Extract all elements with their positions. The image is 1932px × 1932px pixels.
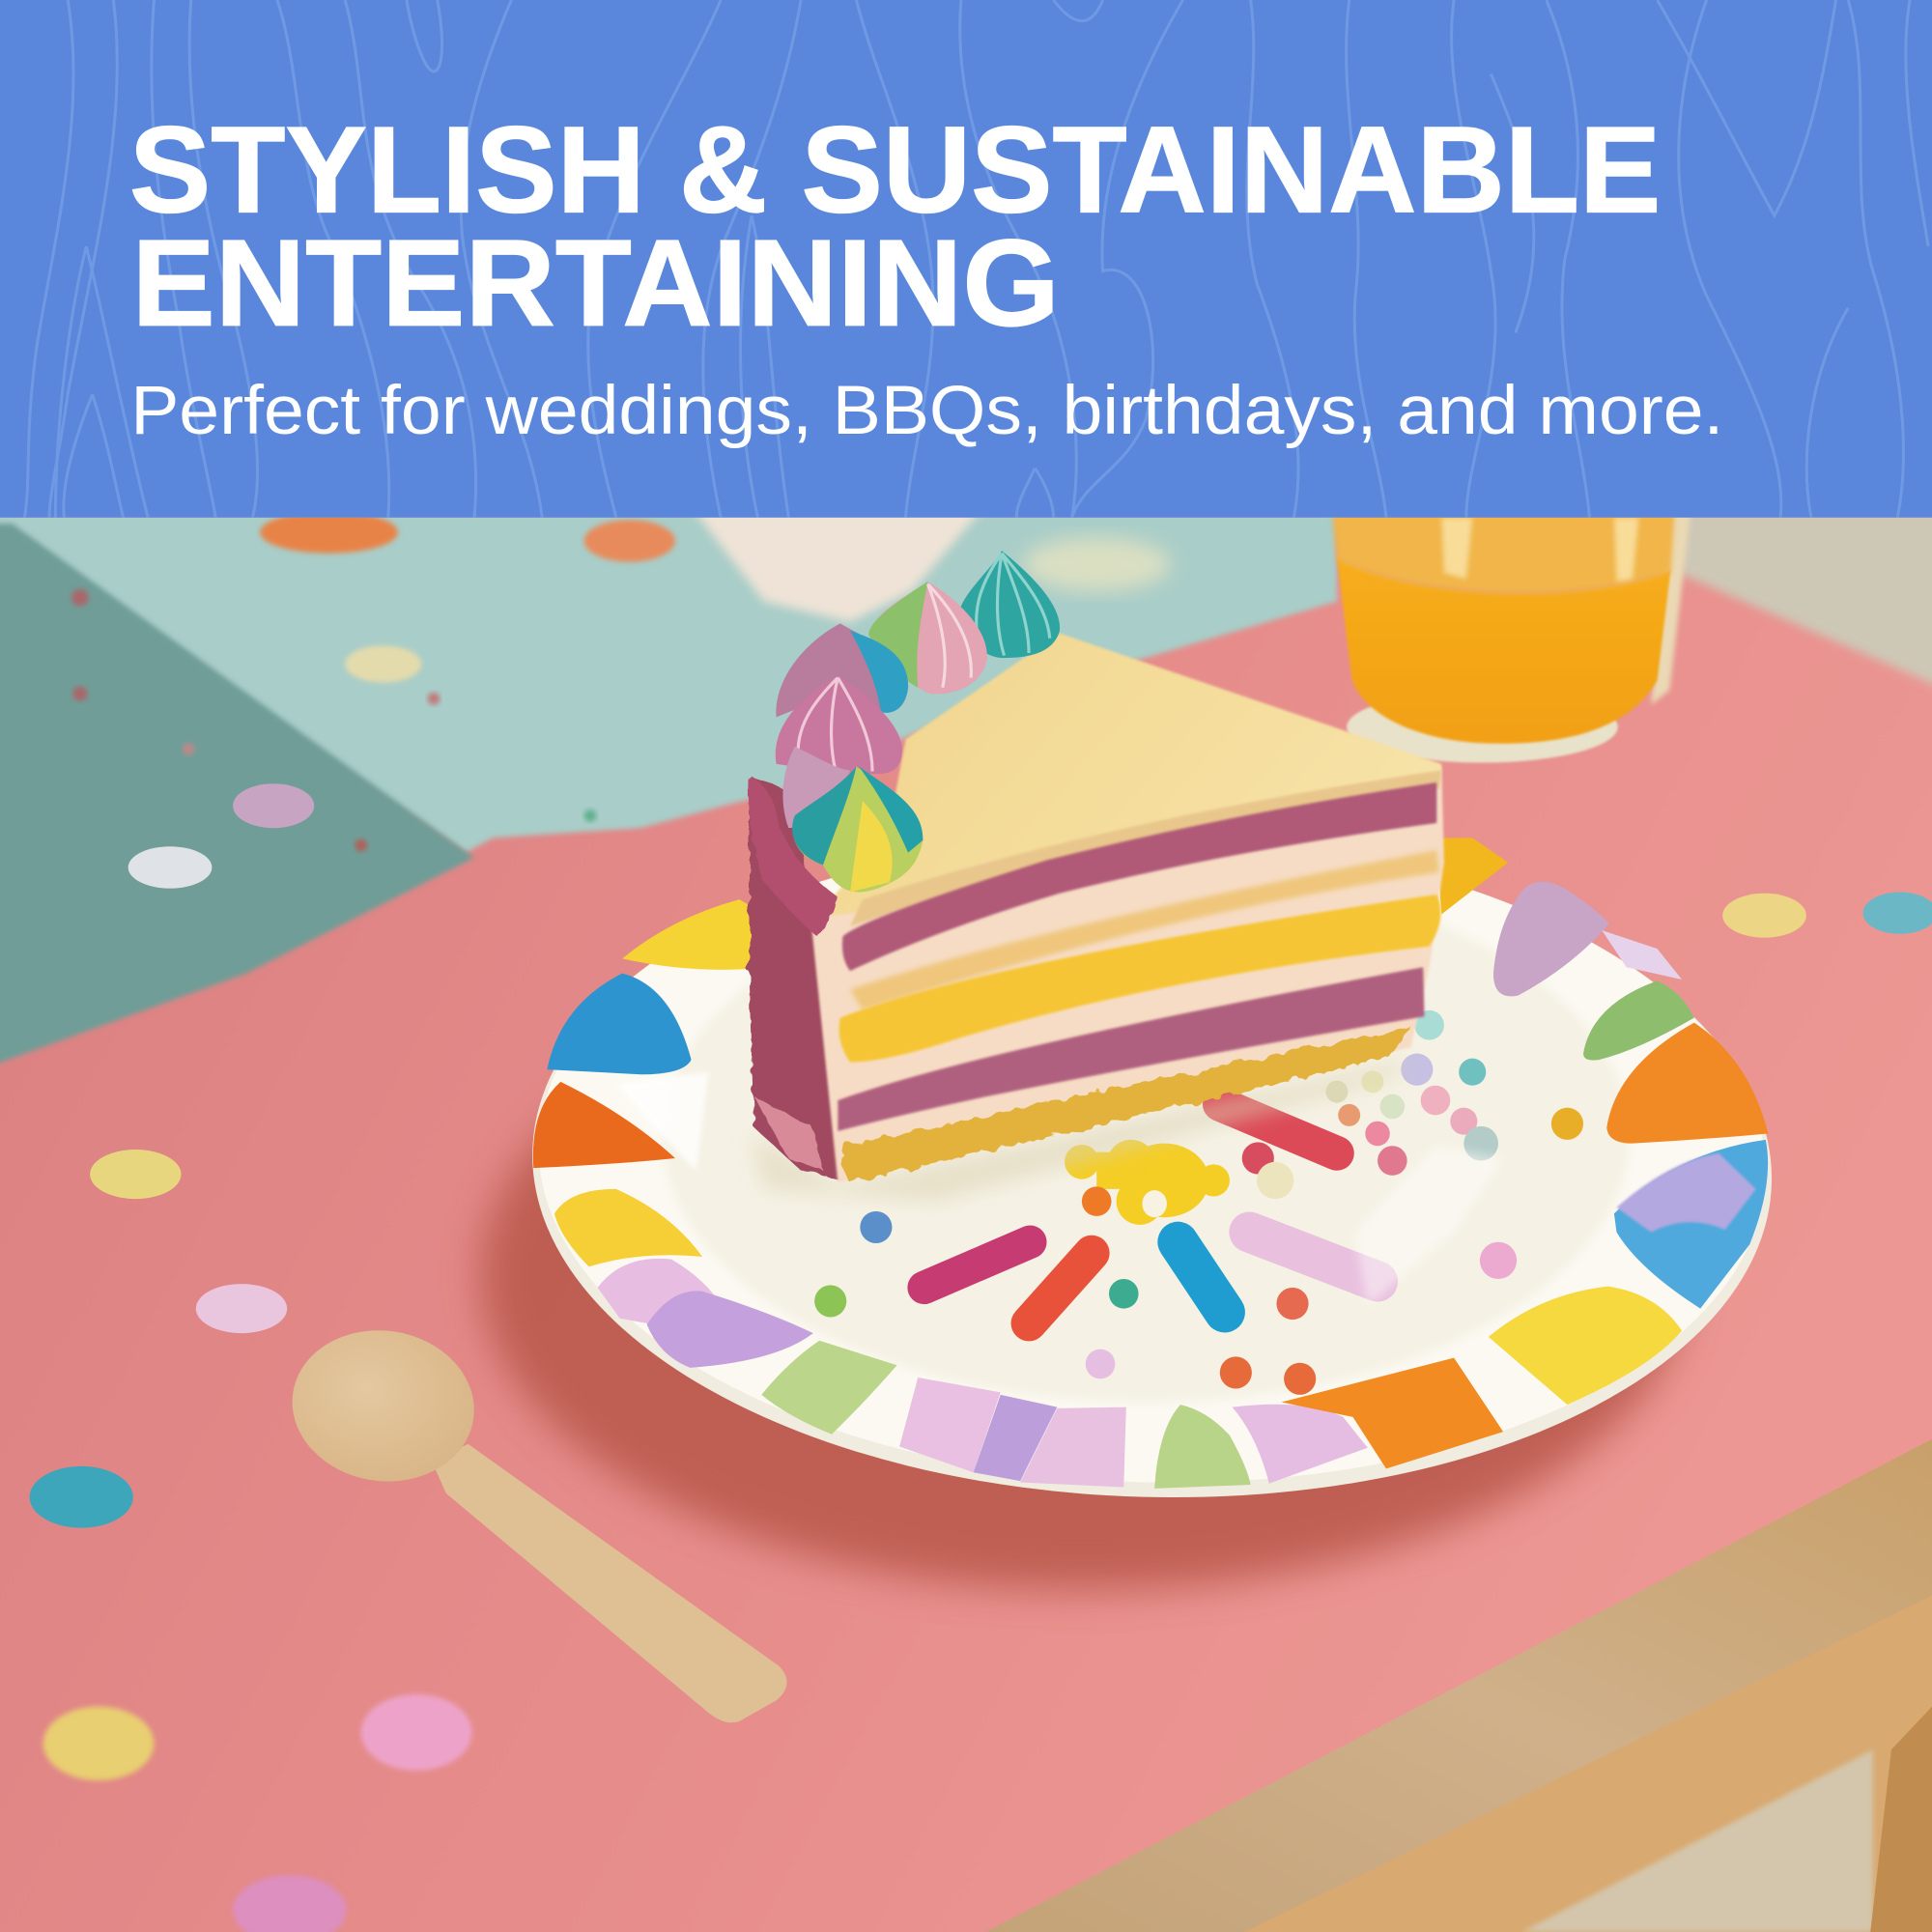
confetti: left side [90, 1150, 182, 1199]
drinking glass of orange juice [1331, 493, 1693, 763]
plate centre dots [814, 1010, 1583, 1395]
banner background [0, 0, 1932, 518]
orange rim patch 3 [1606, 1023, 1768, 1144]
title: ENTERTAINING [131, 215, 1060, 353]
spoon [282, 1319, 787, 1722]
purple rim patch [647, 1291, 813, 1368]
lilac sprinkle [1249, 1233, 1378, 1282]
cake shadow on plate [752, 1060, 1410, 1202]
confetti dots [30, 511, 1932, 1932]
teal meringue [958, 551, 1060, 658]
paper plate [524, 820, 1780, 1513]
spoon bowl [282, 1319, 484, 1493]
green rim patch 3 [1583, 980, 1694, 1061]
plate centre sprinkles [924, 1104, 1378, 1323]
glass upper part [1331, 493, 1676, 593]
confetti: right side [1722, 894, 1806, 938]
title [129, 101, 1661, 353]
table wood side [1244, 1596, 1932, 1932]
dark teal napkin [0, 524, 474, 1067]
top edge shadow [850, 770, 1441, 926]
plate shadow [480, 961, 1688, 1589]
cake top icing [813, 634, 1441, 918]
orange sprinkle [1029, 1253, 1092, 1323]
confetti: on napkin [260, 511, 398, 554]
lower raspberry layer [838, 967, 1424, 1131]
glass highlights [1441, 518, 1638, 582]
side frosting pale pink base [754, 1096, 823, 1171]
subtitle: Perfect for weddings, BBQs, birthdays, and more. [130, 372, 1723, 449]
yellow flower blob [1065, 1140, 1230, 1225]
green rim patch [761, 1341, 897, 1435]
yellow rim patch 3 [1489, 1287, 1682, 1405]
thin cream and orange layer [850, 850, 1439, 1010]
pink rim patch 2 [899, 1378, 1001, 1472]
crumb base layer [841, 1026, 1410, 1182]
small lilac meringue [782, 747, 850, 828]
yellow sponge layer [839, 895, 1441, 1062]
spoon handle [431, 1444, 787, 1722]
pink-green meringue [868, 582, 987, 694]
blurred fork and spoon on napkin [690, 505, 985, 622]
pale teal napkin [0, 493, 1337, 853]
cake slice [749, 551, 1444, 1202]
rainbow meringue [792, 766, 923, 892]
purple-pink meringue [776, 675, 902, 774]
red sprinkle [1220, 1104, 1337, 1153]
glass wall tint [1333, 493, 1693, 705]
magenta sprinkle [924, 1242, 1030, 1288]
title: STYLISH & SUSTAINABLE [129, 101, 1661, 239]
blue sprinkle [1178, 1242, 1225, 1312]
table wood edge [985, 1439, 1932, 1932]
purple rim patch 3 [1493, 882, 1609, 996]
plate white rim [530, 821, 1774, 1498]
green rim patch 2 [1154, 1405, 1251, 1489]
blue and purple rim patch [1614, 1140, 1768, 1309]
rim pattern shapes [533, 838, 1768, 1489]
pink rim patch 4 [1233, 1405, 1368, 1484]
glossy reflections [616, 1072, 1503, 1306]
plate edge [524, 820, 1780, 1513]
plate inner well [663, 870, 1629, 1403]
floor beneath table [1521, 1749, 1873, 1932]
orange rim patch 2 [1282, 1358, 1503, 1468]
orange rim patch [533, 1082, 675, 1168]
meringue frosting swirls [749, 551, 1060, 939]
pink rim patch [598, 1259, 721, 1324]
small yellow rim patch [1435, 838, 1508, 914]
photo: cake on a party table [0, 493, 1932, 1932]
blurred pale shape on napkin [1023, 537, 1171, 591]
blue-pink meringue [776, 623, 908, 717]
table leg [1870, 1707, 1932, 1932]
yellow rim patch [622, 899, 756, 970]
upper raspberry layer [842, 782, 1436, 971]
cake outer side [750, 777, 840, 1180]
pink rim patch 3 [1020, 1407, 1126, 1488]
blue rim patch [547, 974, 692, 1074]
juice [1337, 557, 1671, 744]
cake front face [810, 766, 1444, 1182]
header banner [0, 0, 1932, 518]
pink tablecloth [0, 666, 1932, 1783]
lilac rim tint [1602, 930, 1682, 980]
blurred background corner [1682, 518, 1932, 688]
purple rim patch 2 [974, 1395, 1057, 1481]
wood grain pattern [25, 0, 1928, 518]
glass base [1347, 692, 1618, 763]
yellow rim patch 2 [554, 1189, 702, 1266]
crumb frosting edge [749, 774, 838, 939]
